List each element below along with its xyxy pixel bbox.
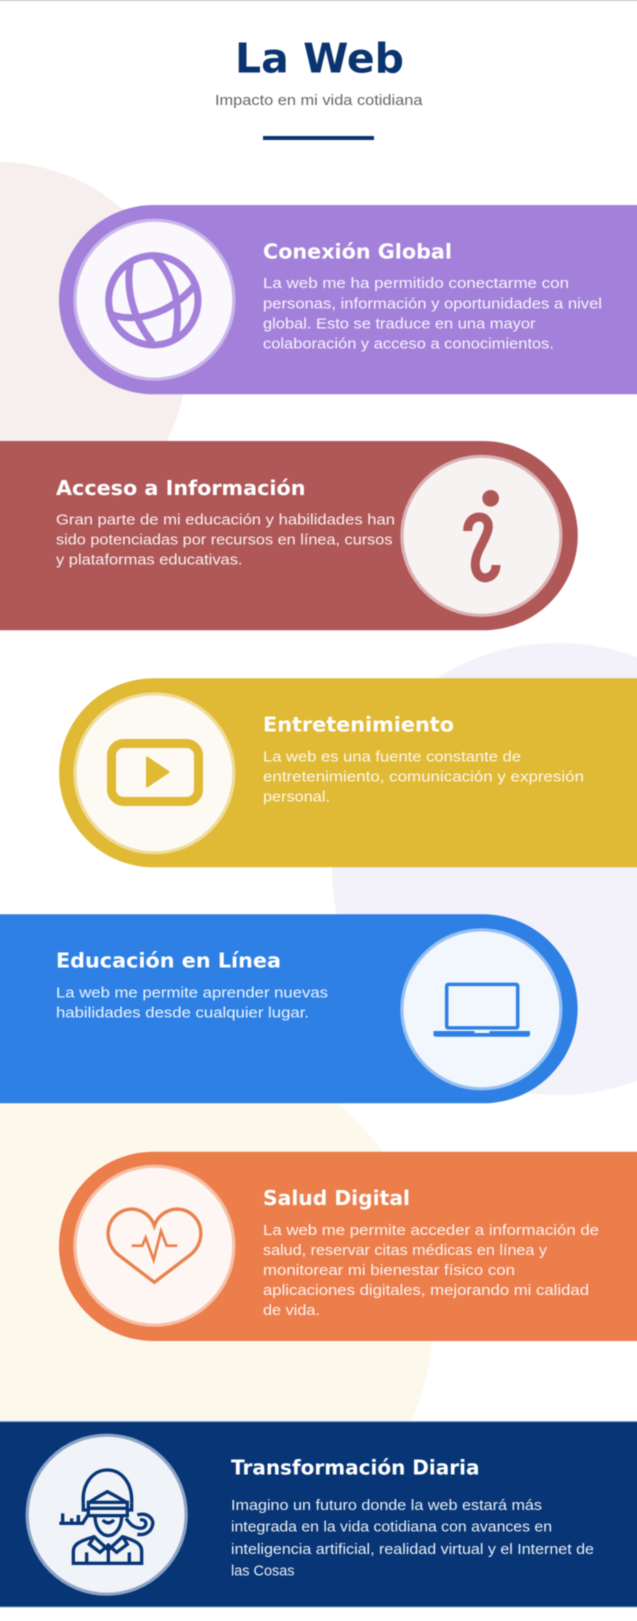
body text: las Cosas (231, 1563, 294, 1580)
icon: person with VR headset (27, 1435, 186, 1594)
body text: colaboración y acceso a conocimientos. (263, 335, 554, 352)
background blob: cream (0, 1038, 434, 1586)
body text: La web es una fuente constante de (263, 749, 521, 766)
body text (231, 1497, 594, 1580)
body text: inteligencia artificial, realidad virtual y el Internet de (231, 1541, 594, 1558)
background blob: lavender (332, 643, 637, 1095)
body text (56, 985, 328, 1022)
panel: Transformación Diaria (0, 1421, 637, 1608)
body text: personas, información y oportunidades a nivel (263, 295, 602, 312)
body text (263, 1222, 599, 1319)
body text (56, 511, 395, 569)
body text: aplicaciones digitales, mejorando mi calidad (263, 1282, 589, 1299)
body text: entretenimiento, comunicación y expresión (263, 769, 584, 786)
panel: Salud Digital (59, 1152, 637, 1341)
heading: Transformación Diaria (231, 1455, 480, 1479)
body text: Gran parte de mi educación y habilidades han (56, 511, 395, 528)
icon: globe (75, 220, 234, 379)
body text: sido potenciadas por recursos en línea, cursos (56, 532, 393, 549)
heading: Educación en Línea (56, 949, 281, 973)
body text: habilidades desde cualquier lugar. (56, 1005, 309, 1022)
body text: salud, reservar citas médicas en línea y (263, 1242, 548, 1259)
icon: information (402, 456, 561, 615)
panel: Acceso a Información (0, 441, 578, 630)
body text: y plataformas educativas. (56, 552, 242, 569)
body text: La web me permite aprender nuevas (56, 985, 328, 1002)
body text: global. Esto se traduce en una mayor (263, 315, 536, 332)
body text: La web me permite acceder a información de (263, 1222, 599, 1239)
heading: Conexión Global (263, 240, 452, 264)
body text: Imagino un futuro donde la web estará más (231, 1497, 542, 1514)
icon: heart with pulse (75, 1166, 234, 1325)
title: La Web (235, 34, 404, 82)
panel: Conexión Global (59, 205, 637, 394)
body text: de vida. (263, 1302, 320, 1319)
icon: laptop (402, 930, 561, 1089)
body text (263, 749, 584, 806)
body text: personal. (263, 789, 330, 806)
subtitle: Impacto en mi vida cotidiana (215, 92, 423, 109)
body text: integrada en la vida cotidiana con avances en (231, 1519, 552, 1536)
heading: Salud Digital (263, 1186, 410, 1210)
heading: Entretenimiento (263, 713, 454, 737)
body text: La web me ha permitido conectarme con (263, 275, 569, 292)
background blob: pink (0, 162, 188, 544)
heading: Acceso a Información (56, 476, 306, 500)
panel: Educación en Línea (0, 914, 578, 1103)
icon: video player (75, 694, 234, 853)
body text (263, 275, 602, 352)
title underline (263, 136, 374, 140)
panel: Entretenimiento (59, 678, 637, 867)
body text: monitorear mi bienestar físico con (263, 1262, 515, 1279)
